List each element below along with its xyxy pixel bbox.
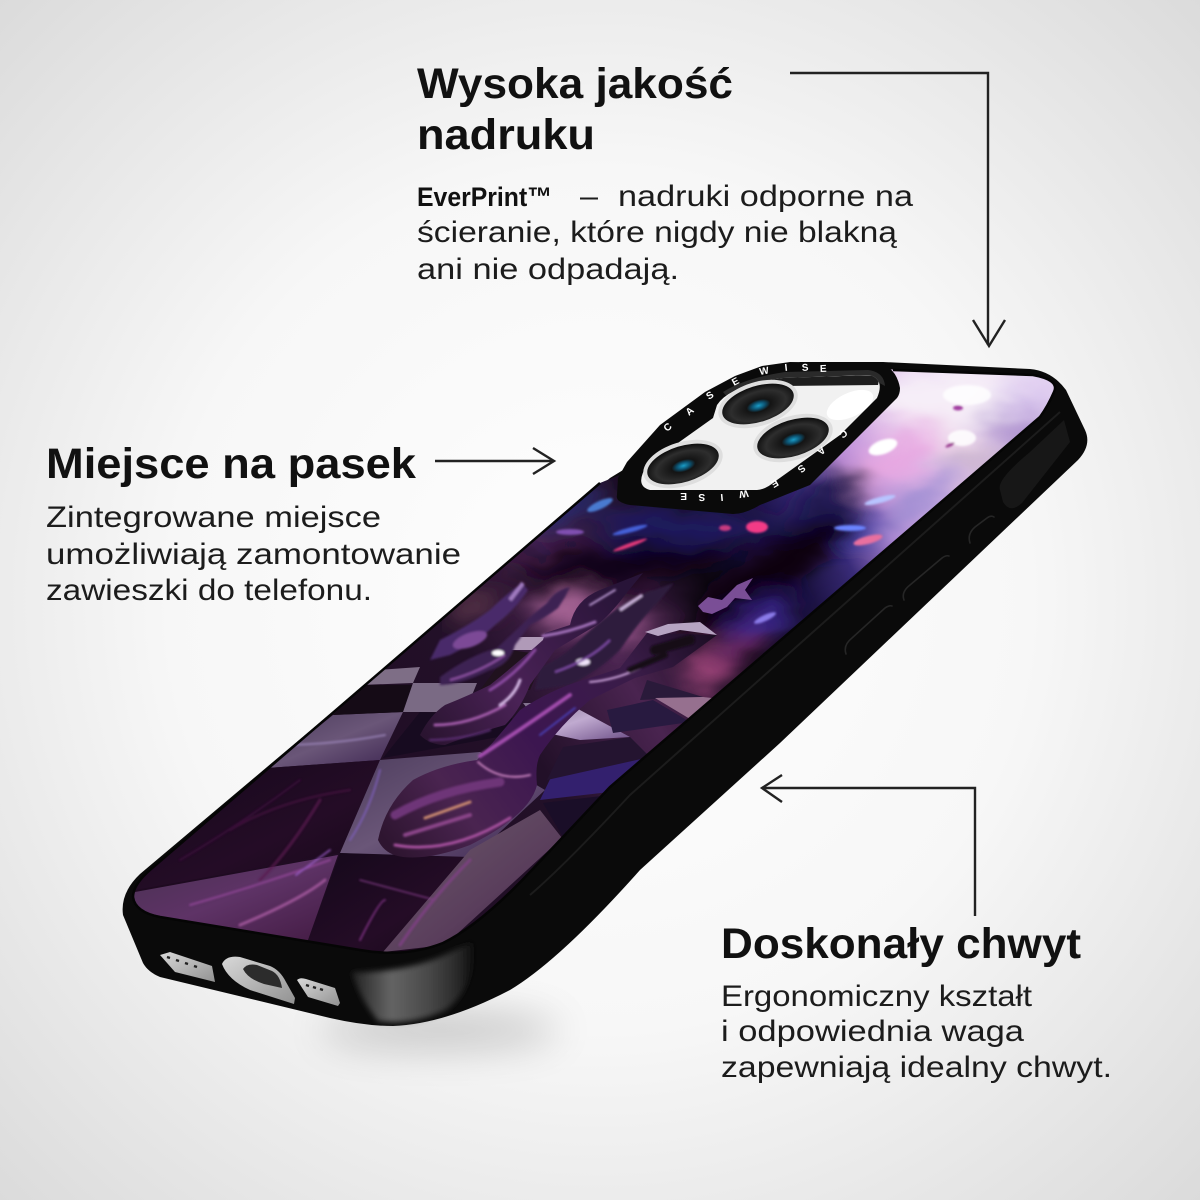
heading and text: strap slot: zawieszki do telefonu. bbox=[46, 574, 372, 607]
chess pieces bbox=[378, 573, 753, 858]
heading and text: perfect grip: Ergonomiczny kształt bbox=[721, 980, 1033, 1013]
brand ring text: WISE bbox=[680, 487, 749, 502]
arrow: to strap slot bbox=[435, 448, 554, 474]
checkerboard bbox=[120, 637, 730, 955]
king crown bbox=[645, 622, 717, 636]
heading and text: strap slot bbox=[46, 440, 461, 607]
heading and text: strap slot: Zintegrowane miejsce bbox=[46, 501, 381, 534]
side buttons bbox=[845, 516, 994, 654]
phone case bbox=[100, 340, 1100, 1026]
heading and text: print quality: Wysoka jakość bbox=[417, 60, 733, 108]
heading and text: perfect grip bbox=[721, 920, 1112, 1084]
brand ring text: CASE bbox=[662, 376, 742, 434]
king highlights bbox=[395, 640, 690, 847]
brand ring text: CASE bbox=[768, 427, 849, 489]
port: left speaker bbox=[160, 952, 215, 982]
strap slot lump bbox=[1000, 420, 1070, 508]
screen rim bbox=[133, 370, 1055, 953]
port: right speaker bbox=[297, 978, 340, 1006]
front king bbox=[378, 633, 717, 858]
case body bbox=[123, 362, 1087, 1026]
lens right bbox=[747, 405, 839, 471]
heading and text: print quality: EverPrint™ bbox=[417, 182, 552, 212]
arrow: to phone side bbox=[762, 775, 975, 916]
frame top band bbox=[723, 370, 885, 398]
heading and text: print quality: ani nie odpadają. bbox=[417, 253, 679, 286]
brand ring text bbox=[662, 363, 849, 502]
nebula sky bbox=[442, 362, 1060, 701]
heading and text: perfect grip: zapewniają idealny chwyt. bbox=[721, 1051, 1112, 1084]
bump frame bbox=[617, 362, 900, 514]
port: usb-c bbox=[222, 957, 295, 1004]
board streaks bbox=[180, 735, 470, 945]
heading and text: print quality bbox=[417, 60, 913, 286]
arrow: to phone top corner bbox=[790, 73, 1005, 346]
printed artwork bbox=[134, 369, 1054, 952]
bishop bbox=[440, 587, 570, 685]
heading and text: strap slot: Miejsce na pasek bbox=[46, 440, 416, 488]
heading and text: strap slot: umożliwiają zamontowanie bbox=[46, 538, 461, 571]
lens top bbox=[712, 371, 804, 437]
heading and text: perfect grip: i odpowiednia waga bbox=[721, 1015, 1024, 1048]
camera bump bbox=[617, 362, 900, 514]
far piece bbox=[430, 583, 528, 660]
heading and text: print quality: ścieranie, które nigdy nie blakną bbox=[417, 216, 897, 249]
heading and text: print quality: nadruku bbox=[417, 111, 595, 159]
side groove bbox=[530, 412, 1060, 895]
heading and text: print quality: nadruki odporne na bbox=[618, 180, 913, 213]
brand ring text: WISE bbox=[759, 363, 827, 378]
lens left bbox=[637, 431, 729, 497]
camera window bbox=[641, 375, 880, 490]
heading and text: perfect grip: Doskonały chwyt bbox=[721, 920, 1081, 968]
heading and text: print quality: – bbox=[580, 180, 598, 213]
nebula sparkles bbox=[556, 385, 991, 626]
king cross bbox=[698, 578, 753, 614]
queen highlights bbox=[430, 590, 615, 740]
phone shadow bbox=[320, 1012, 560, 1048]
queen bbox=[420, 573, 643, 745]
bottom corner highlight bbox=[352, 942, 473, 1022]
crown piece back bbox=[535, 583, 674, 690]
